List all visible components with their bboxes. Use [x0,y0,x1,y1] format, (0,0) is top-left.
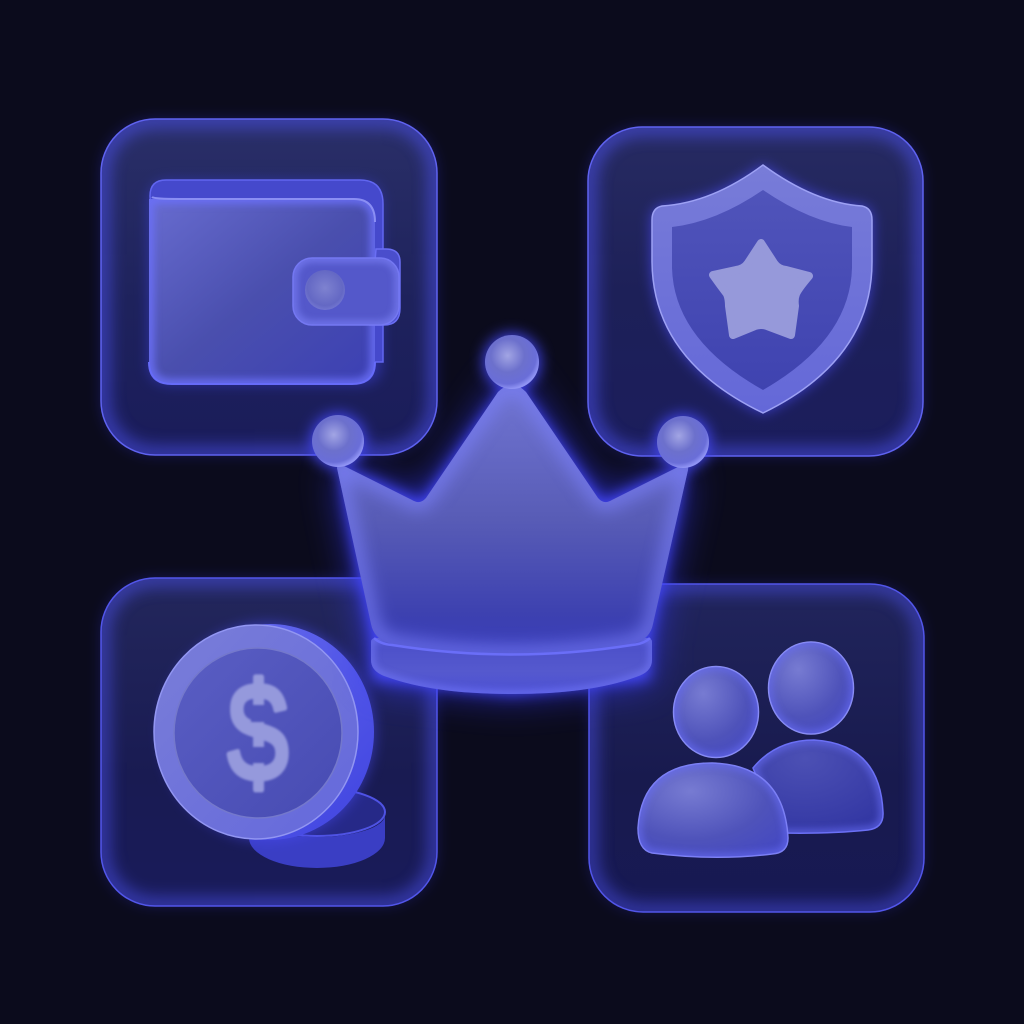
icon: coins [154,624,385,868]
back person [753,642,883,833]
crown balls [312,335,709,468]
star [713,243,809,335]
dollar sign: $ [228,655,288,810]
wallet clasp [293,249,400,325]
illustration: glass icon tiles with crown [94,112,930,918]
panel: wallet tile [101,119,437,455]
crown band [371,638,652,694]
icon: wallet [149,180,400,384]
front person [638,666,788,857]
panel: shield tile [588,127,923,456]
icon: crown [310,333,711,694]
crown body [337,385,688,654]
icon: shield with star [652,165,872,413]
icon: two people [638,642,883,857]
panel: people tile [589,584,924,912]
panel: coin tile [101,578,437,906]
small coin [249,788,385,868]
